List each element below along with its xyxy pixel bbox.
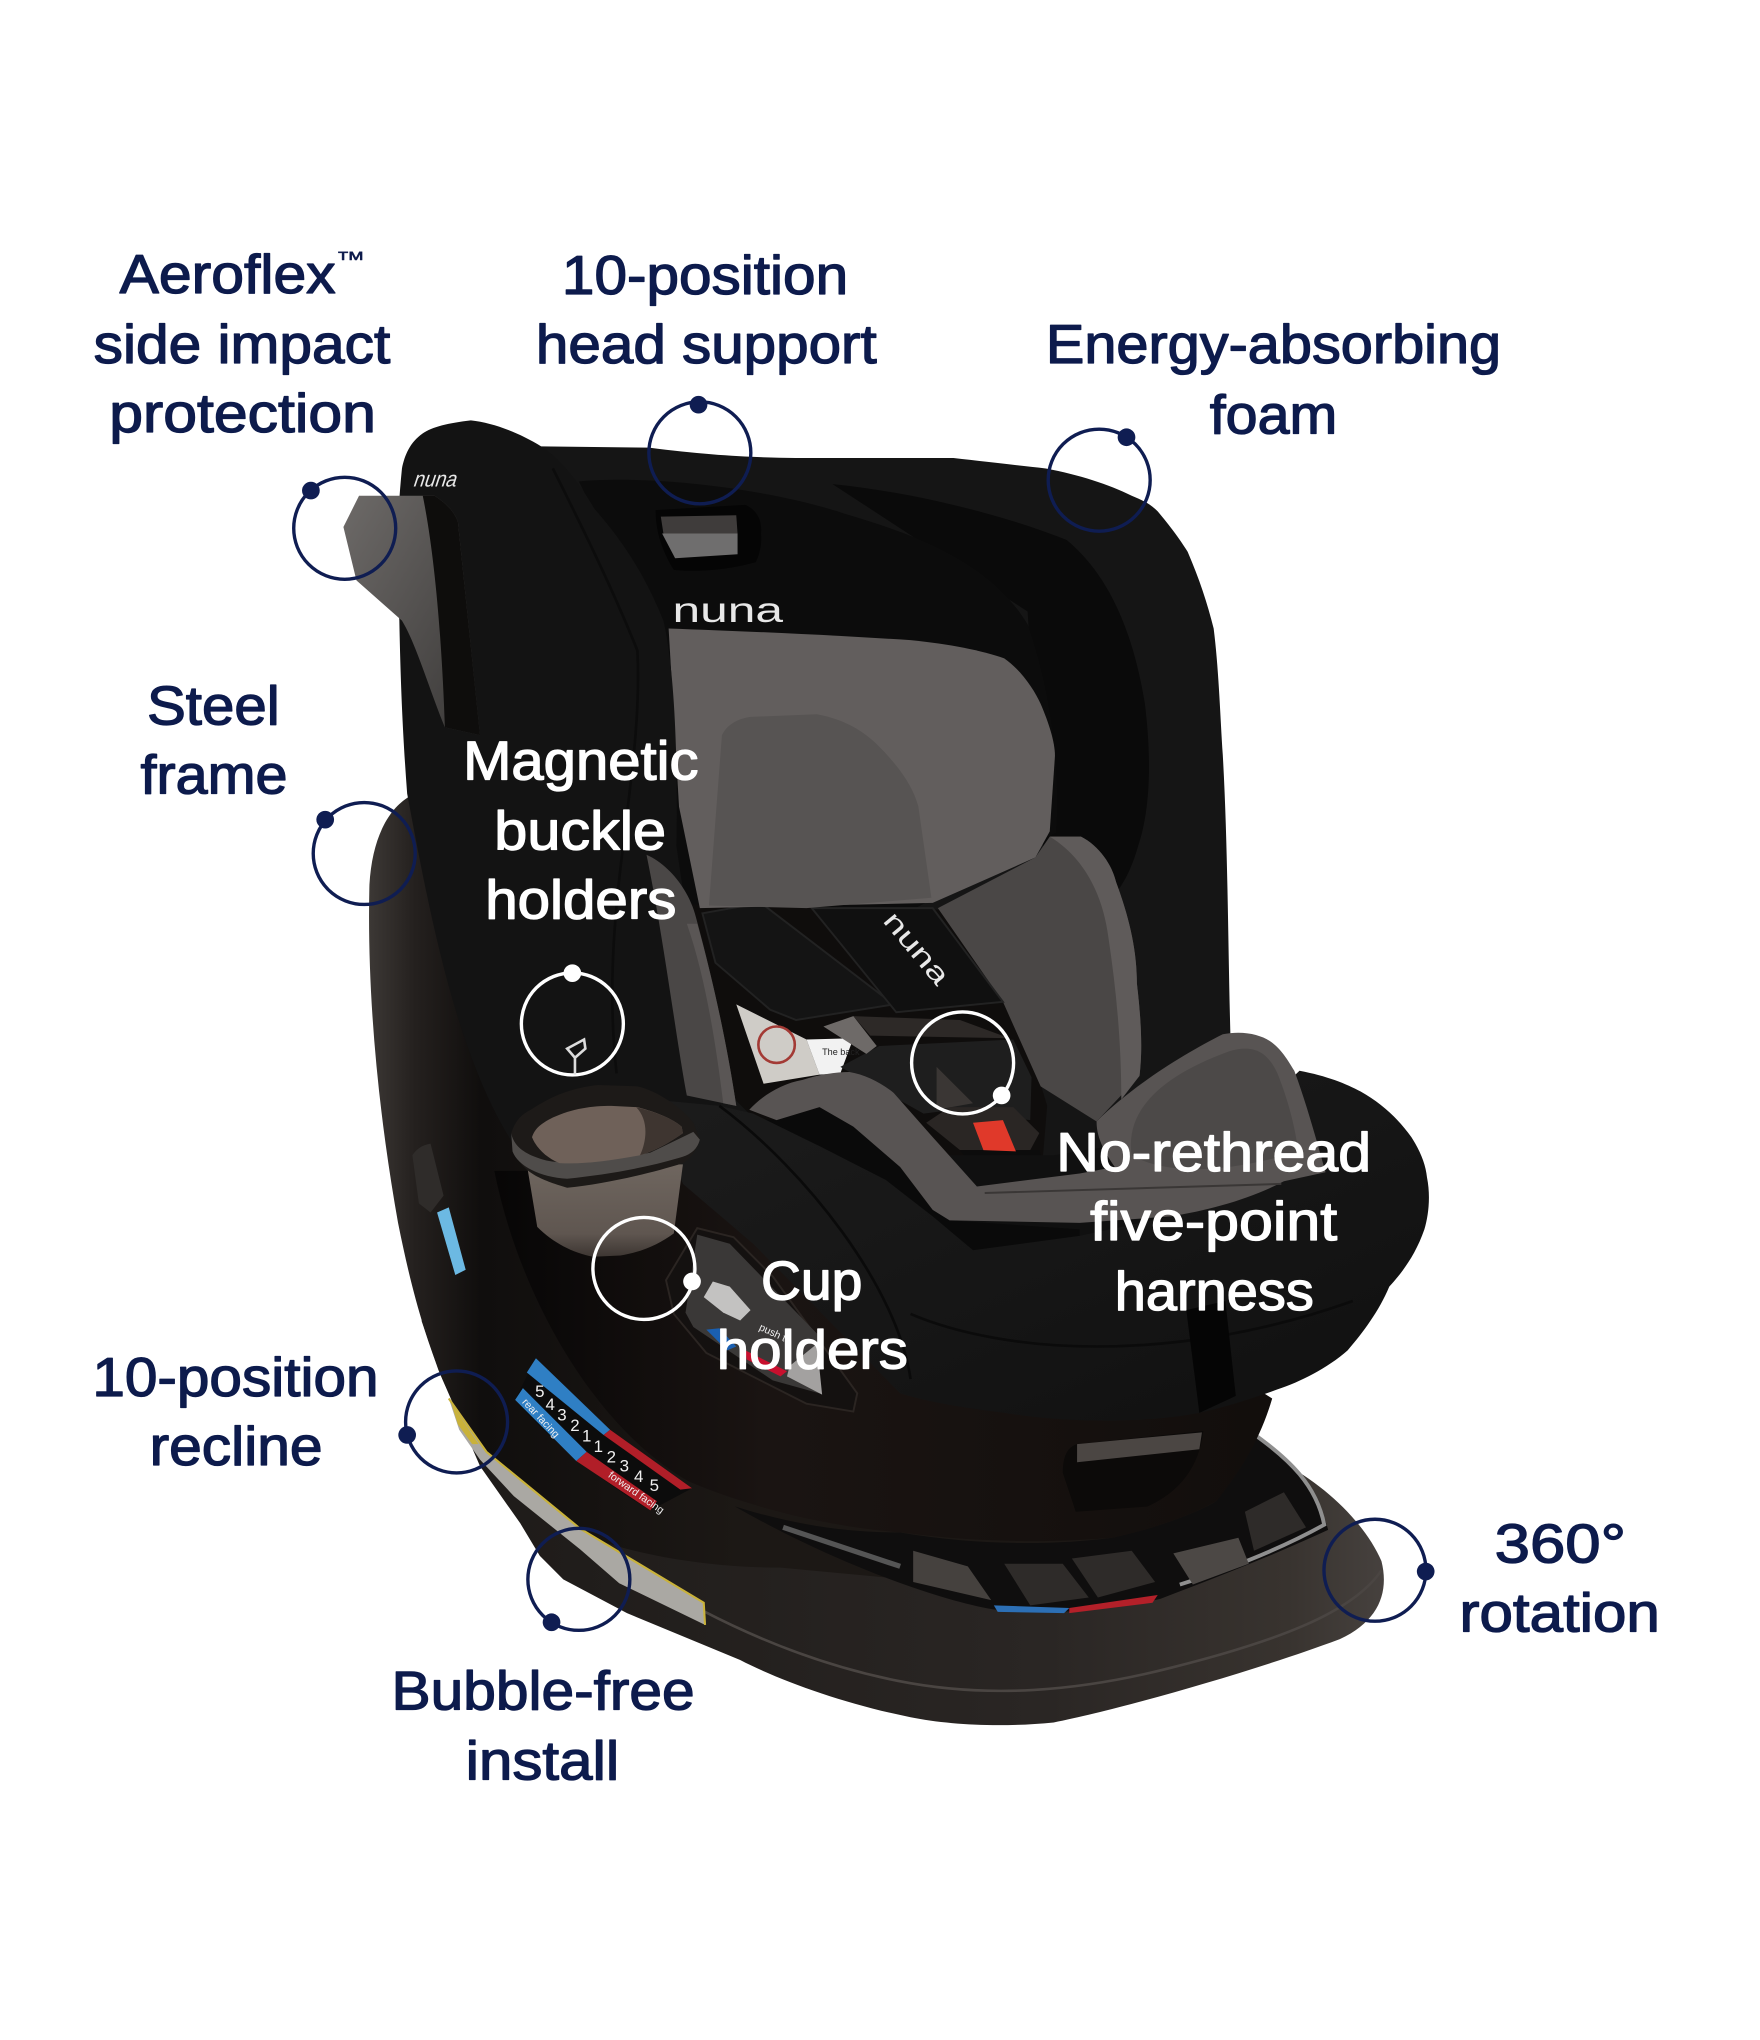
callout: No-rethread five-point harness [912, 1012, 1371, 1322]
callout: Steel frame [140, 676, 415, 904]
recline indicator [515, 1358, 692, 1517]
callout: 360° rotation [1324, 1513, 1660, 1643]
marker [649, 396, 751, 504]
marker [1324, 1519, 1435, 1621]
recline numbers: 5 [650, 1476, 659, 1495]
left side column [397, 420, 728, 1189]
left body gray strip [647, 855, 736, 1106]
marker [398, 1371, 508, 1473]
label: 10-position [562, 245, 848, 306]
marker [1048, 428, 1150, 531]
label [92, 1347, 379, 1477]
marker [521, 964, 623, 1075]
label [1460, 1513, 1660, 1643]
label: Aeroflex [120, 244, 336, 305]
marker [912, 1012, 1014, 1114]
label: frame [140, 745, 287, 806]
label [1056, 1122, 1371, 1322]
label: head support [536, 314, 877, 375]
recline numbers: 1 [582, 1426, 591, 1445]
indicator side labels: forward facing [606, 1470, 666, 1517]
recline numbers: 3 [620, 1456, 629, 1475]
label: rotation [1460, 1582, 1660, 1643]
label [140, 676, 287, 806]
callout: Energy-absorbing foam [1046, 314, 1501, 531]
label: ™ [336, 247, 366, 272]
label: No-rethread [1056, 1122, 1371, 1183]
side info window [666, 1228, 857, 1412]
label: 10-position [92, 1347, 379, 1408]
marker [313, 803, 415, 904]
label [1046, 314, 1501, 445]
callout: 10-position head support [536, 245, 877, 504]
pedestal under cushion [494, 1171, 1272, 1541]
headrest inner panel [579, 480, 1057, 911]
label: Steel [147, 676, 280, 737]
label: install [466, 1731, 619, 1792]
seat back [541, 446, 1231, 1171]
recline numbers: 2 [570, 1416, 580, 1435]
label: Energy-absorbing [1046, 314, 1501, 375]
head adjust handle [656, 505, 761, 571]
belt path warning sticker [449, 1399, 705, 1625]
warning label [736, 1004, 860, 1084]
label: buckle [494, 801, 666, 862]
indicator side labels [519, 1397, 666, 1517]
recline numbers: 4 [634, 1467, 643, 1486]
head gray pad [669, 628, 1055, 908]
marker [294, 477, 396, 579]
headrest outer bolster [833, 484, 1149, 937]
label: 360° [1495, 1513, 1626, 1574]
crotch strap [1186, 1301, 1236, 1413]
warning text: The back [822, 1047, 860, 1057]
marker [593, 1217, 701, 1319]
callout: Magnetic buckle holders [463, 730, 699, 1075]
label: side impact [94, 314, 390, 375]
cup holder [511, 1085, 700, 1257]
outer shell [369, 796, 1301, 1587]
label [717, 1251, 908, 1381]
label: Cup [761, 1251, 862, 1312]
label: five-point [1090, 1191, 1337, 1252]
strap logo: nuna [877, 905, 957, 992]
harness recess [689, 904, 1047, 1184]
body gray pad right [938, 837, 1141, 1121]
harness straps [702, 903, 1003, 1020]
recline numbers: 5 [535, 1382, 545, 1401]
label: holders [717, 1320, 908, 1381]
recline numbers: 1 [594, 1437, 603, 1456]
label [463, 730, 699, 931]
label: harness [1115, 1261, 1314, 1322]
recline numbers [535, 1382, 659, 1495]
callout: Bubble-free install [392, 1528, 695, 1792]
label [94, 244, 390, 444]
rotating base [421, 1320, 1384, 1725]
lower gray seat pad [749, 1033, 1326, 1223]
label: foam [1210, 384, 1337, 445]
wing logo: nuna [411, 466, 462, 492]
indicator side labels: rear facing [519, 1397, 561, 1441]
recline numbers: 2 [607, 1447, 616, 1466]
installation guide sticker on base [735, 1432, 1328, 1613]
callout: Aeroflex side impact protection [94, 244, 396, 579]
label: Bubble-free [392, 1660, 695, 1721]
callout: 10-position recline [92, 1347, 508, 1477]
shadow under gray arch [753, 1107, 1080, 1255]
seat cushion [650, 1071, 1429, 1421]
cushion backing [937, 1073, 1353, 1262]
back adjust tag [412, 1144, 466, 1275]
buckle and chest clip [823, 1016, 1046, 1180]
column inner seam [553, 468, 638, 1073]
label: recline [150, 1416, 323, 1477]
window small print: push to [757, 1322, 793, 1347]
recline numbers: 3 [557, 1406, 567, 1425]
callout: Cup holders [593, 1217, 908, 1381]
car seat product illustration [343, 420, 1429, 1725]
label [392, 1660, 695, 1792]
label: protection [109, 383, 376, 444]
logo on headrest: nuna [673, 591, 784, 630]
marker [528, 1528, 630, 1631]
recline numbers: 4 [546, 1395, 555, 1414]
label [536, 245, 877, 375]
side impact pod [343, 496, 480, 735]
label: holders [485, 870, 676, 931]
label: Magnetic [463, 730, 699, 791]
